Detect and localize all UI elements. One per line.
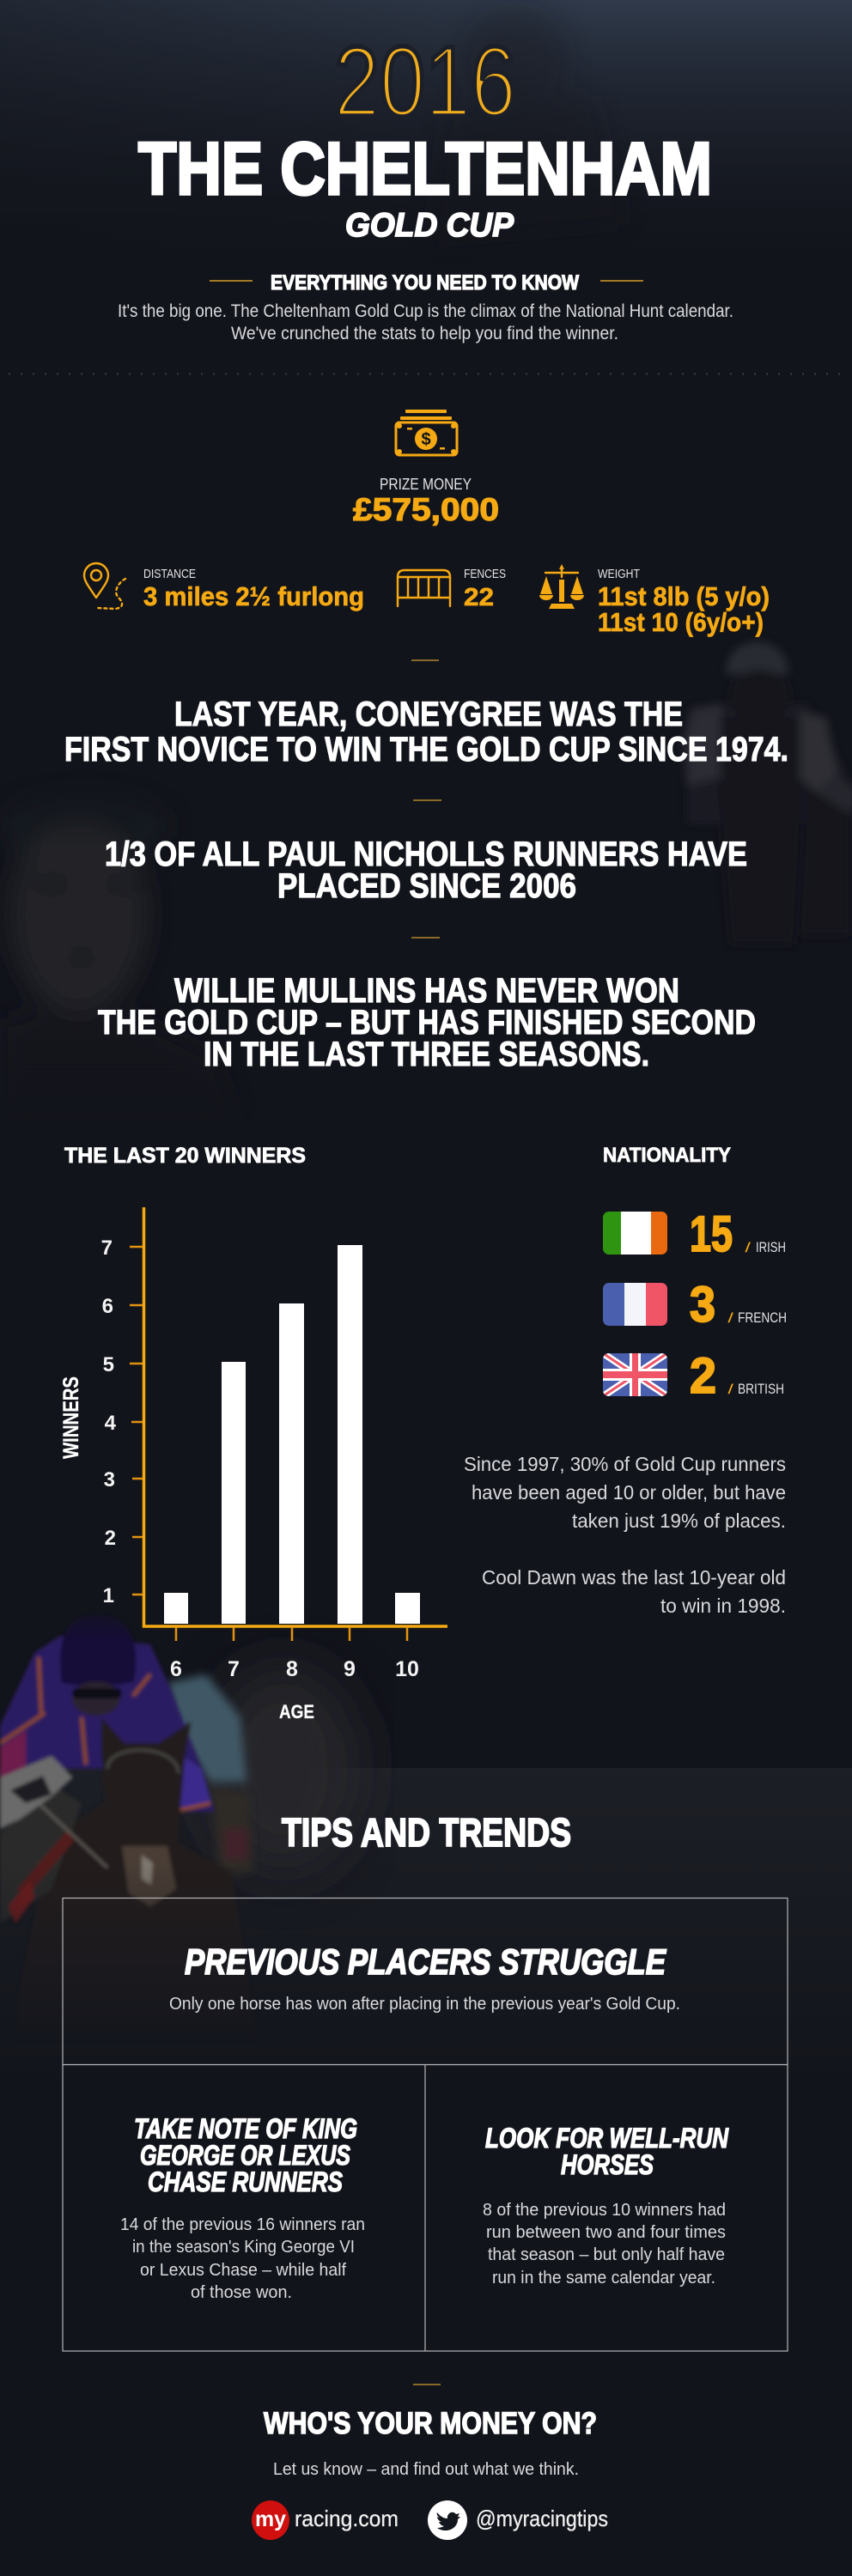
fact: Coneygree bbox=[64, 696, 788, 769]
tip: well-run horses: that season – but only half have bbox=[488, 2245, 725, 2264]
tip: King George or Lexus runners bbox=[120, 2113, 365, 2302]
subtitle: Gold Cup: GOLD CUP bbox=[345, 207, 514, 244]
stat: distance bbox=[84, 563, 364, 611]
fact: Paul Nicholls bbox=[105, 835, 747, 905]
tip: King George or Lexus runners: of those won. bbox=[191, 2282, 292, 2302]
prize money value: £575,000 bbox=[353, 492, 499, 527]
tip: well-run horses: run between two and four times bbox=[486, 2222, 726, 2242]
nationality: French: FRENCH bbox=[738, 1309, 787, 1326]
tip: King George or Lexus runners: TAKE NOTE OF KING bbox=[134, 2113, 357, 2144]
icon: scales bbox=[539, 564, 584, 609]
heading: who's your money on: WHO'S YOUR MONEY ON? bbox=[264, 2407, 597, 2440]
logo: myracing.com bbox=[252, 2500, 399, 2540]
fact: Willie Mullins bbox=[98, 972, 756, 1073]
fact: Paul Nicholls: PLACED SINCE 2006 bbox=[277, 867, 576, 905]
fact: Willie Mullins: IN THE LAST THREE SEASONS. bbox=[204, 1036, 649, 1073]
stat: weight bbox=[539, 564, 770, 637]
y axis labels: 6 bbox=[102, 1295, 113, 1318]
x axis labels: 6 bbox=[170, 1657, 182, 1681]
intro heading with rules: EVERYTHING YOU NEED TO KNOW bbox=[271, 271, 579, 295]
nationality: Irish: / bbox=[745, 1241, 751, 1255]
title: year 2016: 2016 bbox=[334, 26, 516, 137]
age statistics text bbox=[464, 1453, 786, 1617]
nationality: British: BRITISH bbox=[738, 1381, 784, 1397]
stat: fences: 22 bbox=[464, 584, 494, 611]
axis title: winners: WINNERS bbox=[59, 1376, 83, 1459]
icon: twitter bird bbox=[428, 2500, 467, 2540]
y axis labels: 4 bbox=[105, 1412, 117, 1435]
fact: Paul Nicholls: 1/3 OF ALL PAUL NICHOLLS RUNNERS HAVE bbox=[105, 835, 747, 873]
heading: tips and trends: TIPS AND TRENDS bbox=[282, 1810, 571, 1855]
title: The Cheltenham: THE CHELTENHAM bbox=[138, 128, 712, 210]
link: twitter handle: @myracingtips bbox=[476, 2506, 608, 2531]
tip: well-run horses: LOOK FOR WELL-RUN bbox=[485, 2123, 729, 2154]
tip: well-run horses bbox=[483, 2123, 729, 2287]
y axis labels: 5 bbox=[103, 1353, 114, 1376]
call to action text: Let us know – and find out what we think. bbox=[273, 2459, 579, 2479]
nationality: British: 2 bbox=[690, 1348, 716, 1404]
stat: fences bbox=[398, 567, 506, 611]
tip: previous placers struggle bbox=[169, 1941, 680, 2014]
icon: British flag bbox=[603, 1353, 667, 1396]
tip: previous placers struggle: PREVIOUS PLACERS STRUGGLE bbox=[185, 1941, 667, 1982]
fact: Willie Mullins: WILLIE MULLINS HAS NEVER WON bbox=[174, 972, 679, 1010]
fact: Willie Mullins: THE GOLD CUP – BUT HAS FINISHED SECOND bbox=[98, 1004, 756, 1042]
icon: fence bbox=[398, 570, 450, 606]
fact: Coneygree: LAST YEAR, CONEYGREE WAS THE bbox=[174, 696, 683, 733]
stat: distance: 3 miles 2½ furlong bbox=[143, 581, 364, 611]
age statistics text: Since 1997, 30% of Gold Cup runners bbox=[464, 1453, 786, 1475]
stat: fences: FENCES bbox=[464, 567, 506, 581]
heading: the last 20 winners: THE LAST 20 WINNERS bbox=[64, 1144, 306, 1168]
x axis labels: 9 bbox=[344, 1657, 356, 1681]
background: faded jockey on the right bbox=[684, 642, 852, 945]
x axis labels bbox=[170, 1657, 419, 1681]
icon: banknote stack: $ bbox=[421, 430, 431, 449]
tip: King George or Lexus runners: GEORGE OR LEXUS bbox=[140, 2140, 351, 2171]
age statistics text: to win in 1998. bbox=[660, 1595, 786, 1617]
y axis labels: 3 bbox=[104, 1468, 115, 1492]
prize money label: PRIZE MONEY bbox=[380, 476, 472, 493]
tip: King George or Lexus runners: or Lexus Chase – while half bbox=[140, 2260, 346, 2280]
tip: King George or Lexus runners: in the season's King George VI bbox=[132, 2237, 355, 2257]
axes and ticks bbox=[130, 1207, 447, 1641]
y axis labels bbox=[101, 1236, 117, 1607]
bar chart: winners by age bbox=[59, 1207, 447, 1722]
tip: King George or Lexus runners: CHASE RUNNERS bbox=[148, 2166, 344, 2197]
age statistics text: have been aged 10 or older, but have bbox=[472, 1481, 786, 1504]
logo: myracing.com: my bbox=[255, 2507, 286, 2531]
icon: French flag bbox=[603, 1283, 667, 1326]
stat: weight: WEIGHT bbox=[598, 567, 640, 581]
icon: banknote stack bbox=[396, 410, 457, 455]
x axis labels: 10 bbox=[395, 1657, 419, 1681]
intro paragraph: It's the big one. The Cheltenham Gold Cup is the climax of the National Hunt calendar. bbox=[118, 301, 733, 321]
y axis labels: 7 bbox=[101, 1236, 113, 1260]
background: colour jockey photo bbox=[0, 1616, 359, 1923]
age statistics text: Cool Dawn was the last 10-year old bbox=[482, 1566, 786, 1589]
intro paragraph: We've crunched the stats to help you find the winner. bbox=[231, 324, 618, 343]
axis title: age: AGE bbox=[279, 1701, 314, 1722]
tip: well-run horses: HORSES bbox=[561, 2149, 654, 2180]
tip: King George or Lexus runners: 14 of the previous 16 winners ran bbox=[120, 2215, 365, 2234]
tip: well-run horses: 8 of the previous 10 winners had bbox=[483, 2200, 726, 2220]
icon: map pin with route bbox=[84, 563, 125, 609]
nationality: Irish: IRISH bbox=[756, 1239, 786, 1255]
y axis labels: 2 bbox=[105, 1527, 116, 1550]
panel: tips grid bbox=[63, 1898, 788, 2351]
heading: nationality: NATIONALITY bbox=[603, 1144, 731, 1167]
icon: Irish flag bbox=[603, 1212, 667, 1255]
y axis labels: 1 bbox=[103, 1584, 114, 1607]
nationality: Irish: 15 bbox=[690, 1206, 733, 1262]
x axis labels: 7 bbox=[228, 1657, 240, 1681]
tip: previous placers struggle: Only one horse has won after placing in the previous year's Gold Cup. bbox=[169, 1994, 680, 2014]
nationality: British: / bbox=[727, 1382, 733, 1397]
nationality: British bbox=[603, 1353, 783, 1396]
background: faded trainer portrait bbox=[10, 819, 148, 1015]
tip: well-run horses: run in the same calendar year. bbox=[492, 2268, 715, 2287]
background: header haze with faint rider bbox=[0, 0, 852, 283]
nationality: Irish bbox=[603, 1212, 785, 1255]
stat: distance: DISTANCE bbox=[143, 567, 196, 581]
intro paragraph bbox=[118, 301, 733, 343]
stat: weight: 11st 8lb (5 y/o) bbox=[598, 581, 770, 611]
bars bbox=[164, 1245, 420, 1624]
link: twitter handle bbox=[428, 2500, 608, 2540]
nationality: French bbox=[603, 1283, 786, 1326]
background: lighter lower band bbox=[0, 1768, 852, 2094]
nationality: French: / bbox=[727, 1311, 733, 1326]
logo: myracing.com: racing.com bbox=[295, 2506, 399, 2531]
nationality: French: 3 bbox=[690, 1277, 715, 1333]
x axis labels: 8 bbox=[286, 1657, 298, 1681]
stat: weight: 11st 10 (6y/o+) bbox=[598, 607, 764, 637]
age statistics text: taken just 19% of places. bbox=[572, 1510, 786, 1532]
